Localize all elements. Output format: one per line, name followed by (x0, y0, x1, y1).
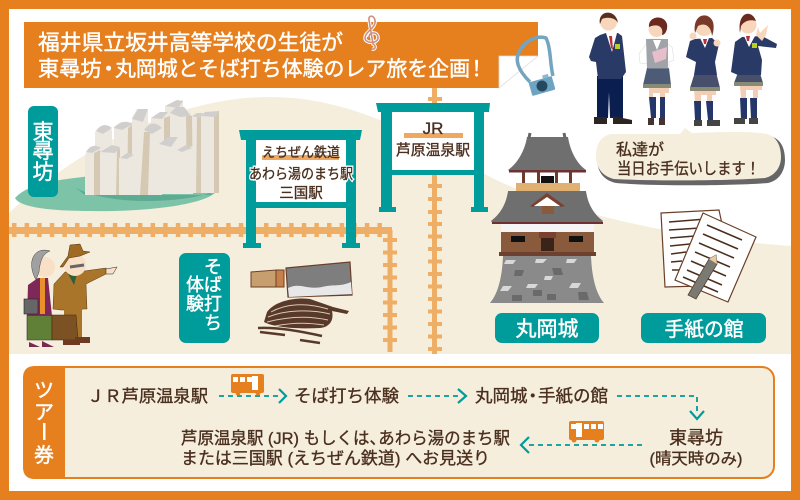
banner: title: 東尋坊 (38, 57, 102, 81)
ticket tab: 券 (34, 444, 54, 467)
label: soba making: ば (204, 275, 222, 295)
label: soba making: ち (204, 313, 222, 333)
banner: title: ・ (98, 58, 119, 81)
label: Tojinbo (28, 106, 58, 197)
speech bubble: 私達が (616, 141, 664, 159)
label: soba making: 打 (204, 294, 222, 314)
sign: Echizen Railway stations: あわら湯のまち駅 (249, 166, 353, 183)
middle columns (114, 122, 133, 194)
sign: Echizen Railway stations (239, 130, 362, 248)
illustration: elderly couple (24, 244, 117, 347)
banner: title (24, 22, 538, 88)
sign: Echizen Railway stations: あわら湯のまち駅 (249, 166, 353, 183)
label: Letter Museum (641, 313, 766, 343)
banner: title: 福井県立坂井高等学校の生徒が (38, 31, 343, 55)
student: girl with folder (639, 18, 674, 125)
icon: bus outbound (231, 374, 264, 396)
sign: Echizen Railway stations: 三国駅 (279, 186, 323, 202)
route stops: 丸岡城 (475, 386, 528, 406)
label: soba making (179, 253, 230, 343)
sign: JR Awara Onsen station: JR (423, 119, 443, 138)
route stops: 東尋坊 (669, 428, 723, 448)
ticket tab: ア (34, 402, 54, 424)
route stops (87, 386, 742, 468)
panel: tour ticket (23, 366, 774, 479)
route stops: 芦原温泉駅 (JR) もしくは、あわら湯のまち駅 (181, 429, 510, 448)
banner: title: ！ (466, 58, 487, 81)
label: soba making: そ (204, 257, 222, 277)
label: Tojinbo: 坊 (32, 161, 54, 184)
label: Maruoka Castle (495, 313, 599, 343)
ticket tab (23, 366, 65, 479)
illustration: letters and pencil (661, 210, 756, 302)
banner: title: 丸岡城とそば打ち体験のレア旅を企画 (115, 57, 470, 81)
speech bubble: 当日お手伝いします！ (617, 160, 760, 178)
illustration: Maruoka Castle (490, 133, 604, 303)
route stops: ・ (524, 386, 542, 406)
sign: JR Awara Onsen station: 芦原温泉駅 (396, 142, 470, 159)
sign: JR Awara Onsen station (376, 103, 490, 212)
label: Tojinbo: 尋 (32, 140, 54, 163)
speech bubble (596, 128, 785, 185)
student: boy (589, 13, 632, 124)
icon: bus return (569, 421, 604, 442)
label: Letter Museum: 手紙の館 (664, 318, 744, 341)
illustration: Tojinbo cliffs (15, 100, 219, 211)
illustration: soba knife and noodles (251, 262, 352, 343)
route stops: または三国駅 (えちぜん鉄道) へお見送り (181, 449, 490, 468)
icon: treble clef (365, 16, 378, 49)
sign: Echizen Railway stations: えちぜん鉄道 (262, 145, 340, 160)
panel: students (589, 13, 777, 126)
route stops: (晴天時のみ) (650, 450, 742, 468)
back columns (151, 100, 219, 194)
route stops: そば打ち体験 (294, 386, 399, 406)
front columns (159, 136, 178, 194)
arrows (219, 389, 704, 453)
label: Tojinbo: 東 (32, 121, 54, 144)
icon: camera (517, 37, 555, 96)
ticket tab: ツ (34, 380, 54, 402)
label: soba making: 験 (186, 294, 204, 314)
label: Maruoka Castle: 丸岡城 (516, 318, 578, 341)
student: girl with peace sign (731, 14, 777, 124)
route stops: 手紙の館 (538, 386, 608, 406)
label: soba making: 体 (186, 275, 204, 295)
route stops: ＪＲ芦原温泉駅 (87, 387, 208, 406)
student: girl with fists (686, 15, 720, 126)
